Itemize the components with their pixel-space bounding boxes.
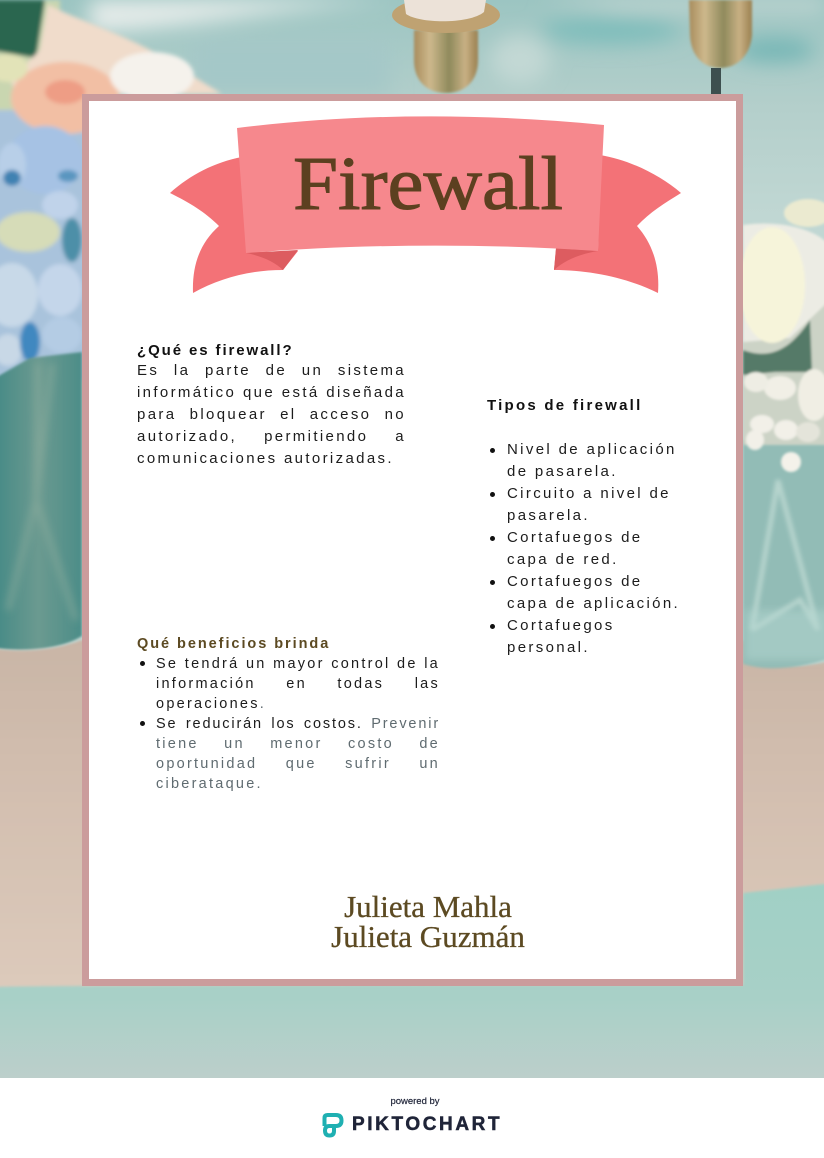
text block: what is firewall — [137, 342, 406, 467]
text block: types of firewall list: capa de aplicación. — [507, 595, 680, 612]
main band — [237, 116, 604, 253]
lower table — [0, 880, 824, 1078]
candle holder right — [689, 0, 752, 96]
text block: types of firewall list: Cortafuegos de — [507, 573, 642, 590]
right tail — [554, 155, 681, 293]
text block: types of firewall list — [487, 397, 680, 656]
icon: piktochart logo — [322, 1113, 344, 1138]
tablecloth — [0, 640, 824, 987]
right vase — [743, 440, 824, 668]
text block: benefits: ciberataque. — [156, 776, 263, 792]
text block: types of firewall list: pasarela. — [507, 507, 590, 524]
powered by: powered by — [390, 1096, 440, 1107]
text block: benefits: oportunidad que sufrir un — [156, 756, 440, 772]
left fold — [246, 250, 298, 270]
authors — [331, 889, 525, 954]
right fold — [554, 248, 598, 270]
text block: benefits: tiene un menor costo de — [156, 736, 440, 752]
text block: benefits: Se reducirán los costos. Prevenir — [156, 716, 440, 732]
text block: types of firewall list: Nivel de aplicación — [507, 441, 677, 458]
authors: Julieta Mahla — [344, 889, 512, 924]
text block: types of firewall list: personal. — [507, 639, 590, 656]
text block: benefits: Se tendrá un mayor control de la — [156, 656, 440, 672]
footer: powered by Piktochart — [0, 1078, 824, 1158]
ribbon banner with title — [170, 116, 681, 293]
text block: what is firewall: informático que está diseñada — [137, 384, 406, 401]
text block: what is firewall: comunicaciones autorizadas. — [137, 450, 394, 467]
text block: benefits: operaciones. — [156, 696, 266, 712]
authors: Julieta Guzmán — [331, 919, 525, 954]
text block: what is firewall: para bloquear el acceso no — [137, 406, 406, 423]
text block: types of firewall list: Circuito a nivel de — [507, 485, 671, 502]
text block: what is firewall: autorizado, permitiendo a — [137, 428, 406, 445]
text block: what is firewall: Es la parte de un sistema — [137, 362, 406, 379]
left vase — [0, 352, 82, 650]
text block: types of firewall list: Cortafuegos de — [507, 529, 642, 546]
candle holder left — [392, 0, 500, 93]
text block: types of firewall list: de pasarela. — [507, 463, 618, 480]
left tail — [170, 157, 298, 293]
right flowers — [739, 199, 824, 472]
text block: what is firewall: ¿Qué es firewall? — [137, 342, 294, 359]
text block: types of firewall list: Tipos de firewall — [487, 397, 643, 414]
left flowers — [0, 0, 222, 380]
title: Firewall — [293, 142, 563, 226]
white card with pink border — [82, 94, 743, 986]
text block: benefits: información en todas las — [156, 676, 440, 692]
text block: benefits — [137, 636, 440, 792]
text block: types of firewall list: Cortafuegos — [507, 617, 615, 634]
wordmark: PIKTOCHART — [352, 1114, 502, 1135]
text block: types of firewall list: capa de red. — [507, 551, 619, 568]
text block: benefits: Qué beneficios brinda — [137, 636, 330, 652]
